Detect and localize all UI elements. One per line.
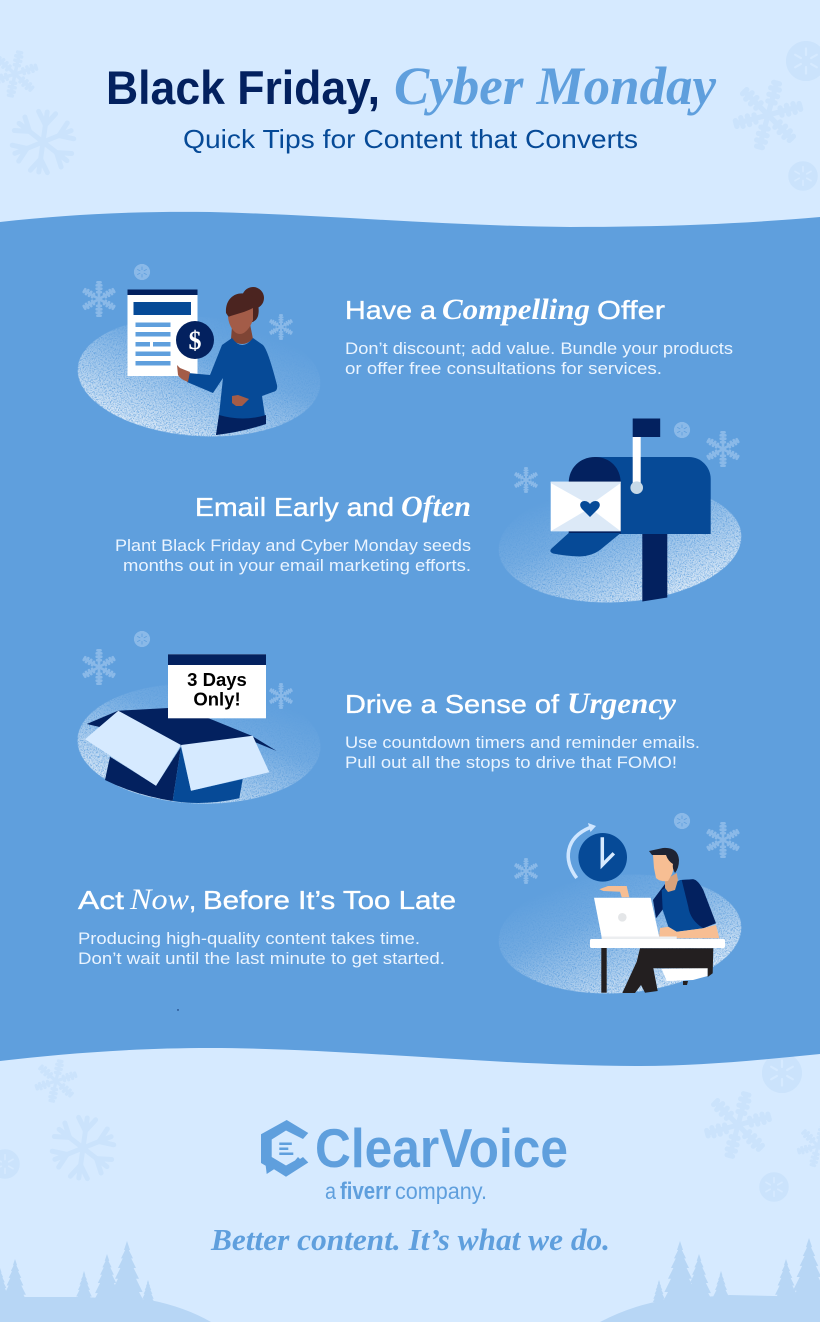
body: Use countdown timers and reminder emails.: [345, 733, 700, 752]
heading: Compelling: [442, 293, 590, 326]
header snowflakes: [0, 41, 820, 191]
fiverr line: company.: [395, 1178, 487, 1204]
mailbox door: [569, 457, 621, 534]
mailbox body: [595, 457, 711, 534]
title: [106, 56, 717, 116]
panel: compelling offer illustration: [74, 264, 324, 444]
heading: Act: [78, 885, 125, 915]
snowflakes: [515, 813, 739, 883]
textured ellipse: [74, 309, 324, 444]
panel: email text: [115, 490, 471, 575]
left trees and hill: [0, 1241, 211, 1322]
blue main band: [0, 212, 820, 1066]
body: Producing high-quality content takes time.: [78, 929, 420, 948]
panel: act now illustration: [495, 813, 745, 1001]
body: Plant Black Friday and Cyber Monday seeds: [115, 536, 471, 555]
sign: Only!: [193, 688, 241, 710]
mailbox tray: [550, 533, 621, 556]
heading: ,: [189, 885, 196, 915]
heading: [345, 687, 677, 720]
panel: urgency text: [345, 687, 700, 772]
fiverr line: a: [325, 1178, 336, 1204]
right trees and hill: [600, 1238, 820, 1322]
title: Cyber Monday: [394, 56, 717, 116]
subtitle: Quick Tips for Content that Converts: [183, 124, 638, 154]
textured ellipse: [75, 679, 323, 808]
body: [345, 339, 733, 378]
heading: Have a: [345, 295, 437, 325]
body: Don’t discount; add value. Bundle your products: [345, 339, 733, 358]
panel: compelling offer text: [345, 293, 733, 378]
envelope: [551, 482, 621, 531]
body: [345, 733, 700, 772]
sign: [168, 654, 266, 718]
dollar coin: [176, 321, 214, 359]
snowflakes: [515, 422, 739, 492]
legs: [622, 948, 713, 993]
fiverr line: [325, 1178, 487, 1205]
document: [128, 290, 198, 376]
desk: [590, 939, 725, 993]
panel: urgency illustration: [75, 631, 323, 808]
heading: [345, 293, 665, 326]
heading: Email Early and: [195, 492, 394, 522]
heading: [78, 883, 456, 916]
body: Pull out all the stops to drive that FOMO!: [345, 753, 677, 772]
heading: Offer: [597, 295, 665, 325]
heading: Before It’s Too Late: [203, 885, 456, 915]
body: months out in your email marketing efforts.: [123, 556, 471, 575]
woman: [177, 287, 277, 435]
textured ellipse: [495, 476, 745, 610]
panel: act now text: [78, 883, 456, 968]
man: [599, 848, 719, 938]
heading: Drive a Sense of: [345, 689, 560, 719]
fiverr line: fiverr: [340, 1178, 391, 1205]
dollar coin: $: [188, 326, 202, 355]
heading: Now: [129, 883, 189, 916]
tagline: Better content. It’s what we do.: [210, 1222, 610, 1257]
body: [78, 929, 445, 968]
snowflakes: [83, 264, 292, 339]
textured ellipse: [495, 867, 745, 1001]
body: or offer free consultations for services.: [345, 359, 662, 378]
body: Don’t wait until the last minute to get started.: [78, 949, 445, 968]
icon: speech hexagon: [261, 1120, 308, 1177]
footer snowflakes: [0, 1053, 820, 1202]
heading: Often: [401, 490, 471, 523]
open box: [85, 708, 277, 803]
sign: 3 Days: [187, 669, 247, 690]
title: Black Friday,: [106, 61, 380, 114]
clock: [568, 823, 627, 882]
laptop: [594, 898, 677, 939]
chair: [662, 968, 708, 985]
flag: [630, 418, 660, 494]
logo: ClearVoice: [261, 1117, 568, 1205]
heading: [195, 490, 471, 523]
snowflakes: [83, 631, 292, 708]
post: [642, 534, 667, 602]
tiny dot: [177, 1009, 179, 1011]
wordmark: ClearVoice: [315, 1117, 568, 1179]
heading: Urgency: [567, 687, 677, 720]
panel: mailbox illustration: [495, 418, 745, 610]
body: [115, 536, 471, 575]
